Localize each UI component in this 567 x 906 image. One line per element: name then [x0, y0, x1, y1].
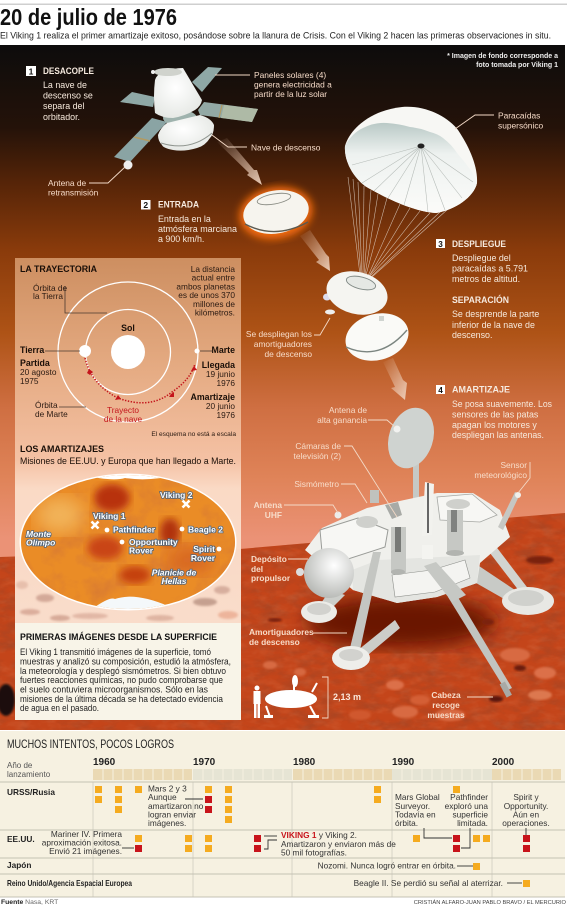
scale note: El esquema no está a escala: [151, 431, 236, 438]
lander body: [305, 493, 510, 603]
body text: de agua en el pasado.: [20, 703, 99, 713]
top rule: [0, 4, 567, 5]
note: Mars 2 y 3: Aunque: [148, 792, 177, 802]
canopy underside: [345, 123, 477, 213]
panel: left column: [15, 258, 241, 624]
description: descenso se: [43, 90, 93, 100]
mars: [194, 348, 200, 354]
lander silhouette: [264, 675, 319, 718]
mars label: Marte: [212, 345, 235, 355]
lower shell: [340, 307, 414, 367]
departure: [20, 358, 57, 386]
site: Pathfinder: Pathfinder: [113, 524, 156, 534]
mars label: [200, 345, 235, 355]
sun: [111, 335, 145, 369]
row labels: EE.UU.: [7, 834, 35, 844]
earth label: [20, 345, 80, 355]
note: Viking: Amartizaron y enviaron más de: [281, 839, 396, 849]
heading: ENTRADA: [158, 200, 199, 210]
label: high gain antenna: [317, 405, 395, 427]
note: image source: * Imagen de fondo corresponde a: [447, 53, 558, 60]
distance note: [176, 264, 235, 318]
earth orbit label: Órbita de: [33, 283, 68, 293]
note: Pathfinder: superficie: [452, 810, 488, 820]
note: image source: foto tomada por Viking 1: [476, 62, 558, 69]
mars orbit: [58, 282, 198, 422]
decade labels: 1960: [93, 757, 116, 768]
launch: Japón: [473, 863, 480, 870]
tanks on deck: [391, 527, 406, 573]
note: Pathfinder: exploró una: [445, 801, 488, 811]
heading: DESACOPLE: [43, 66, 94, 76]
label: shock absorbers deployed: [246, 318, 330, 359]
distance note: millones de: [193, 299, 235, 309]
note: Mars Global Surveyor: [395, 792, 452, 838]
body text: misiones de la última década se ha detectado evidencia: [20, 694, 223, 704]
note: Viking: 50 mil fotografías.: [281, 848, 347, 858]
arrival: 1976: [217, 378, 235, 388]
distance note: actual entre: [192, 272, 235, 282]
label: shock absorbers: Amortiguadores: [249, 627, 314, 637]
site: Viking 1: [92, 511, 126, 528]
label: propellant tank: [251, 554, 308, 583]
site: Beagle 2: Beagle 2: [188, 524, 223, 534]
decade labels: 1990: [392, 757, 415, 768]
label: UHF antenna: [254, 500, 338, 520]
description: sensores de las patas: [452, 410, 539, 420]
site: Spirit Rover: Rover: [191, 553, 216, 563]
launches: URSS/Rusia: [95, 786, 460, 823]
mars orbit label: [35, 400, 86, 419]
label: supersonic parachute: supersónico: [498, 120, 544, 130]
decade labels: [93, 757, 515, 768]
label: seismometer: [294, 479, 367, 503]
label: sampling head: muestras: [427, 710, 465, 720]
timeline heading: MUCHOS INTENTOS, POCOS LOGROS: [7, 737, 174, 751]
note: Beagle II: Beagle II. Se perdió su señal al aterrizar.: [354, 878, 503, 888]
label: shock absorbers: de descenso: [249, 637, 300, 647]
cone: [154, 68, 202, 118]
body text: la meteorología y desplegó sismómetros. Si bien obtuvo: [20, 666, 226, 676]
description: separa del: [43, 101, 84, 111]
scale comparison silhouettes: [254, 675, 361, 718]
step 2: entrada: [141, 200, 237, 244]
distance note: ambos planetas: [176, 282, 235, 292]
separation description: [452, 309, 539, 340]
left foot: [315, 590, 345, 615]
departure: 20 agosto: [20, 367, 57, 377]
note: Mars 2 y 3: [148, 784, 204, 828]
note: Mars Global Surveyor: órbita.: [395, 818, 418, 828]
description: La nave de: [43, 80, 87, 90]
row labels: Reino Unido/Agencia Espacial Europea: [7, 878, 132, 888]
sun label: Sol: [121, 323, 135, 333]
row labels: Japón: [7, 860, 31, 870]
trayectoria heading: LA TRAYECTORIA: [20, 264, 97, 275]
note: Pathfinder: [445, 792, 488, 848]
label: sampling head: Cabeza: [431, 690, 461, 700]
axis label: [7, 761, 51, 779]
fuel tank: [304, 548, 354, 598]
label: high gain antenna: alta ganancia: [317, 415, 367, 425]
label: solar panels: partir de la luz solar: [254, 89, 327, 99]
description: Entrada en la: [158, 214, 211, 224]
illustration: separating capsule: [322, 265, 414, 367]
description: despliegan las antenas.: [452, 430, 544, 440]
separation description: inferior de la nave de: [452, 320, 535, 330]
body text: muestras y analizó su composición, estudió la atmósfera,: [20, 656, 231, 666]
earth orbit label: la Tierra: [33, 291, 63, 301]
axis label: lanzamiento: [7, 770, 51, 779]
step 3: despliegue y separación: [436, 239, 539, 340]
distance note: es de unos 370: [178, 290, 235, 300]
author credit: CRISTIÁN ALFARO-JUAN PABLO BRAVO / EL MERCURIO: [414, 899, 567, 906]
label: supersonic parachute: Paracaídas: [498, 110, 540, 120]
heading: AMARTIZAJE: [452, 384, 510, 394]
launches: EE.UU.: [135, 835, 530, 852]
note: Spirit y Opportunity: Opportunity.: [504, 801, 548, 811]
description: orbitador.: [43, 112, 80, 122]
label: propellant tank: del: [251, 564, 263, 574]
departure: 1975: [20, 376, 39, 386]
landing: 20 junio: [206, 401, 235, 411]
label: UHF antenna: Antena: [254, 500, 282, 510]
launch: Reino Unido: [523, 880, 530, 887]
feature: Planicie de Hellas: Planicie de: [152, 568, 196, 578]
axis label: Año de: [7, 761, 33, 770]
earth orbit label: [33, 283, 107, 313]
panel: first images from the surface: [15, 623, 241, 720]
trajectory label: de la nave: [104, 414, 143, 424]
site: Opportunity Rover: Opportunity: [129, 537, 178, 547]
body text: fuertes reacciones químicas, no pudo comprobarse que: [20, 675, 223, 685]
description: Despliegue del: [452, 253, 511, 263]
note: Viking: [264, 830, 396, 858]
earth label: Tierra: [20, 345, 44, 355]
arrival: 19 junio: [206, 369, 235, 379]
note: Mars 2 y 3: Mars 2 y 3: [148, 784, 187, 794]
number badge 2: 2: [143, 200, 148, 210]
year strip: [93, 769, 561, 780]
label: shock absorbers deployed: amortiguadores: [254, 339, 312, 349]
heading: PRIMERAS IMÁGENES DESDE LA SUPERFICIE: [20, 632, 217, 643]
site: Spirit Rover: [191, 544, 221, 563]
illustration: Viking lander: [296, 402, 554, 698]
label: solar panels: Paneles solares (4): [254, 70, 326, 80]
label: UHF antenna: UHF: [265, 510, 282, 520]
row labels: URSS/Rusia: [7, 787, 55, 797]
number badge 4: 4: [438, 386, 443, 395]
note: Mariner IV: Mariner IV. Primera: [51, 829, 122, 839]
label: shock absorbers deployed: Se despliegan los: [246, 329, 312, 339]
landing: 1976: [217, 410, 235, 420]
landing: [190, 392, 235, 420]
source credit: Fuente Nasa, KRT: [1, 899, 58, 906]
note: Mars 2 y 3: amartizaron no: [148, 801, 204, 811]
note: Pathfinder: Pathfinder: [450, 792, 488, 802]
description: [43, 80, 93, 122]
trajectory label: [104, 405, 143, 424]
landing: Amartizaje: [190, 392, 235, 402]
feature: Monte Olimpo: Monte: [26, 529, 51, 539]
decade labels: 2000: [492, 757, 515, 768]
note: Mariner IV: Envió 21 imágenes.: [49, 846, 122, 856]
grid lines: [0, 782, 565, 897]
feature: Planicie de Hellas: [152, 568, 196, 586]
label: seismometer: Sismómetro: [294, 479, 339, 489]
canopy outer: [345, 107, 477, 213]
label: shock absorbers deployed: de descenso: [264, 349, 312, 359]
trajectory arrowheads: [87, 366, 197, 400]
site: Opportunity Rover: [120, 537, 178, 556]
decade labels: 1980: [293, 757, 316, 768]
note: Pathfinder: limitada.: [457, 818, 488, 828]
body text: el suelo contuviera microorganismos. Sólo en las: [20, 684, 208, 694]
spacecraft trajectory: [85, 358, 195, 403]
earth orbit: [86, 310, 170, 394]
arrival: Llegada: [202, 360, 235, 370]
label: sampling head: [427, 690, 493, 720]
trajectory label: Trayecto: [107, 405, 139, 415]
heading: separación: SEPARACIÓN: [452, 294, 509, 305]
panel: main illustration background: [0, 45, 565, 731]
arrow: separation to landing: [383, 358, 407, 400]
label: solar panels: genera electricidad a: [254, 80, 332, 90]
label: propellant tank: Depósito: [251, 554, 287, 564]
panel: timeline: [0, 731, 565, 897]
front legs: [350, 552, 381, 650]
orbit diagram: [58, 282, 200, 422]
arrow: orbiter to entry: [217, 138, 262, 185]
description: [452, 399, 553, 440]
feature: Monte Olimpo: [26, 529, 55, 548]
earth: [79, 345, 91, 357]
step 4: amartizaje: [436, 384, 553, 440]
step 1: desacople: [26, 66, 94, 122]
label: solar panels: [215, 70, 332, 99]
title: 20 de julio de 1976: [0, 4, 177, 30]
illustration: capsule entering atmosphere: [235, 181, 317, 245]
description: atmósfera marciana: [158, 224, 237, 234]
row labels: [7, 787, 132, 888]
label: relay antenna: retransmisión: [48, 188, 99, 198]
label: weather sensor: [474, 460, 530, 493]
note: Mariner IV: [42, 829, 134, 856]
arrow: entry to parachute stage: [300, 230, 330, 271]
arrival: [202, 360, 235, 388]
description: a 900 km/h.: [158, 234, 204, 244]
separation description: Se desprende la parte: [452, 309, 539, 319]
label: TV cameras: televisión (2): [294, 451, 341, 461]
sample arm and cameras: [422, 482, 434, 536]
label: propellant tank: propulsor: [251, 573, 291, 583]
rear legs: [462, 560, 530, 608]
note: image source: [447, 53, 558, 69]
note: Mars 2 y 3: logran enviar: [148, 810, 196, 820]
amartizajes heading: LOS AMARTIZAJES: [20, 444, 104, 455]
map: Mars landing sites: [20, 470, 236, 614]
descent capsule on orbiter: [158, 115, 214, 151]
label: relay antenna: Antena de: [48, 178, 87, 188]
label: TV cameras: Cámaras de: [295, 441, 341, 451]
description: apagan los motores y: [452, 420, 537, 430]
feature: Planicie de Hellas: Hellas: [161, 576, 187, 586]
site: Viking 1: Viking 1: [93, 511, 126, 521]
note: Nozomi: Nozomi. Nunca logró entrar en órbita.: [318, 860, 456, 870]
site: Opportunity Rover: Rover: [129, 546, 154, 556]
label: sampling head: recoge: [432, 700, 460, 710]
illustration: orbiter with descent vehicle: [114, 67, 258, 170]
mars orbit label: Órbita: [35, 400, 58, 410]
amartizajes subheading: Misiones de EE.UU. y Europa que han llegado a Marte.: [20, 456, 236, 466]
suspension lines: [348, 177, 448, 277]
note: Spirit y Opportunity: [502, 792, 550, 835]
note: Mars Global Surveyor: Todavía en: [395, 810, 436, 820]
note: Spirit y Opportunity: operaciones.: [502, 818, 550, 828]
distance note: kilómetros.: [195, 308, 235, 318]
label: descent vehicle: [212, 135, 321, 152]
body text: El Viking 1 transmitió imágenes de la superficie, tomó: [20, 647, 211, 657]
label: TV cameras: [294, 441, 397, 517]
departure: Partida: [20, 358, 50, 368]
canopy ribs: [352, 146, 473, 212]
label: high gain antenna: Antena de: [329, 405, 367, 415]
label: weather sensor: Sensor: [500, 460, 527, 470]
number badge 1: 1: [29, 66, 34, 76]
number badge 3: 3: [438, 240, 443, 249]
heading: DESPLIEGUE: [452, 239, 506, 249]
vent: [418, 144, 424, 148]
note: Mars Global Surveyor: Surveyor.: [395, 801, 430, 811]
label: supersonic parachute: [455, 110, 544, 130]
note: Spirit y Opportunity: Aún en: [513, 810, 540, 820]
mars orbit label: de Marte: [35, 409, 68, 419]
note: Spirit y Opportunity: Spirit y: [513, 792, 540, 802]
height bracket: 2,13 m: [333, 692, 361, 702]
label: weather sensor: meteorológico: [474, 470, 527, 480]
site: Spirit Rover: Spirit: [193, 544, 215, 554]
human silhouette: [254, 686, 260, 718]
label: descent vehicle: Nave de descenso: [251, 142, 321, 152]
description: metros de altitud.: [452, 274, 520, 284]
separation description: descenso.: [452, 330, 492, 340]
martian ground: [0, 505, 565, 731]
note: Mariner IV: aproximación exitosa.: [42, 838, 122, 848]
description: [158, 214, 237, 244]
description: [452, 253, 528, 284]
distance note: La distancia: [191, 264, 235, 274]
high gain dish: [380, 402, 442, 512]
description: Se posa suavemente. Los: [452, 399, 553, 409]
description: paracaídas a 5.791: [452, 264, 528, 274]
site: Viking 2: Viking 2: [160, 490, 193, 500]
rocks showing through left panel: [16, 581, 238, 621]
decade labels: 1970: [193, 757, 216, 768]
label: shock absorbers: [249, 627, 347, 647]
label: relay antenna: [48, 167, 125, 198]
note: Mars 2 y 3: imágenes.: [148, 818, 186, 828]
note: Viking: VIKING 1 y Viking 2.: [281, 830, 357, 840]
illustration: supersonic parachute: [345, 107, 477, 277]
site: Viking 2: [160, 490, 193, 508]
feature: Monte Olimpo: Olimpo: [26, 538, 55, 548]
note: Mars Global Surveyor: Mars Global: [395, 792, 440, 802]
body text: [20, 647, 231, 713]
